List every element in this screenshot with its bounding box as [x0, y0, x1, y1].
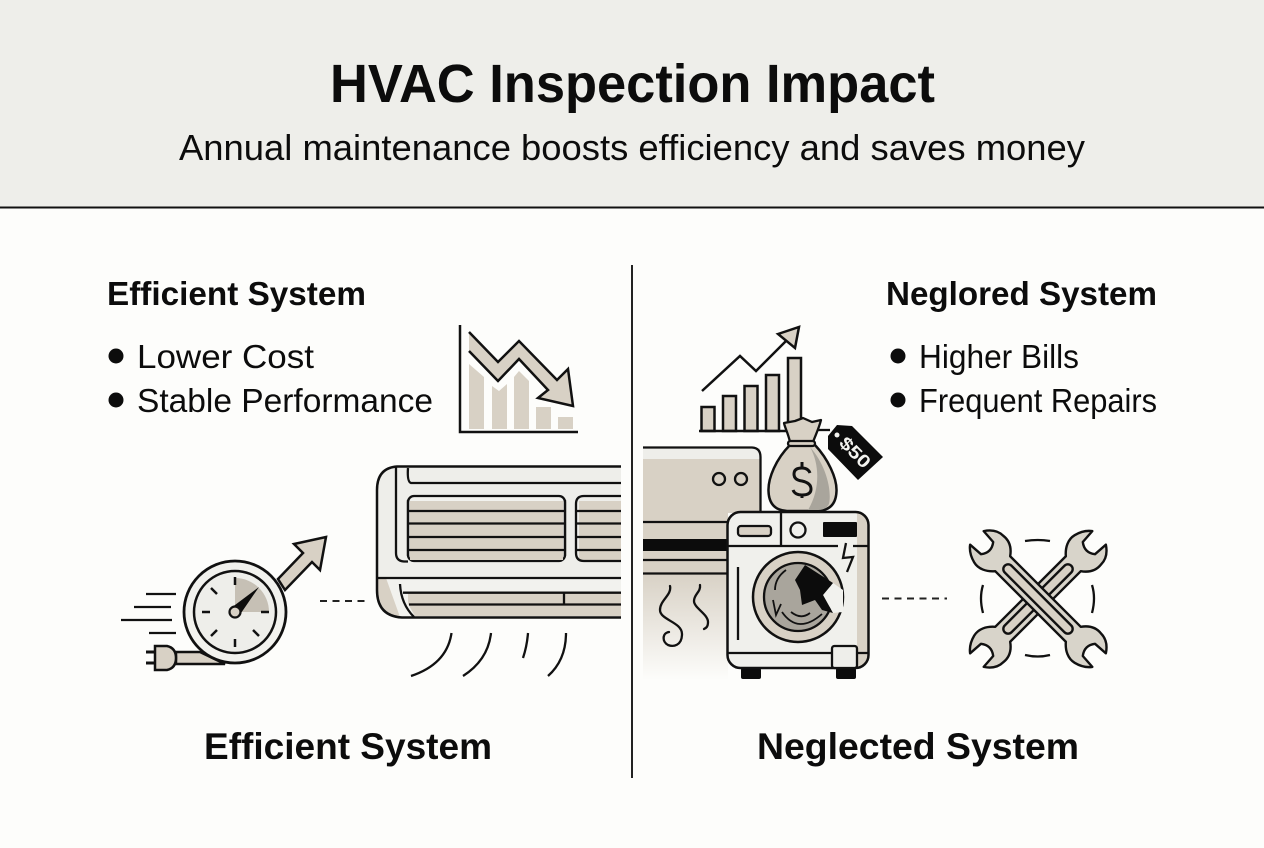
bullet list: neglected drawbacks: Higher Bills [919, 338, 1079, 375]
label: efficient system: Efficient System [204, 726, 492, 767]
icon: crossed wrenches [963, 524, 1113, 674]
bullet list: efficient benefits [108, 338, 433, 419]
title: HVAC Inspection Impact [330, 54, 935, 114]
panel: neglected system [643, 275, 1157, 767]
bullet list: neglected drawbacks [890, 338, 1157, 419]
chart: falling cost [460, 325, 578, 432]
icon: price tag [818, 425, 883, 480]
subtitle: Annual maintenance boosts efficiency and saves money [179, 127, 1085, 168]
connector: washer to wrenches [882, 598, 947, 600]
header band [0, 0, 1264, 208]
bullet list: neglected drawbacks: Frequent Repairs [919, 382, 1157, 419]
icon: money bag [768, 418, 837, 511]
bullet list: efficient benefits: Stable Performance [137, 382, 433, 419]
center divider [631, 265, 633, 778]
connector: gauge to AC [320, 600, 370, 602]
panel: efficient system [107, 275, 621, 767]
icon: washing machine [728, 512, 868, 679]
icon: speed gauge with arrow and plug [121, 537, 326, 670]
icon: worn air conditioner [643, 447, 761, 680]
label: neglected system: Neglected System [757, 726, 1079, 767]
bullet list: efficient benefits: Lower Cost [137, 338, 314, 375]
icon: clean air conditioner [377, 466, 621, 676]
heading: neglored system: Neglored System [886, 275, 1157, 312]
chart: rising bills [699, 327, 801, 431]
icon: price tag: $50 [835, 433, 875, 472]
heading: efficient system: Efficient System [107, 275, 366, 312]
